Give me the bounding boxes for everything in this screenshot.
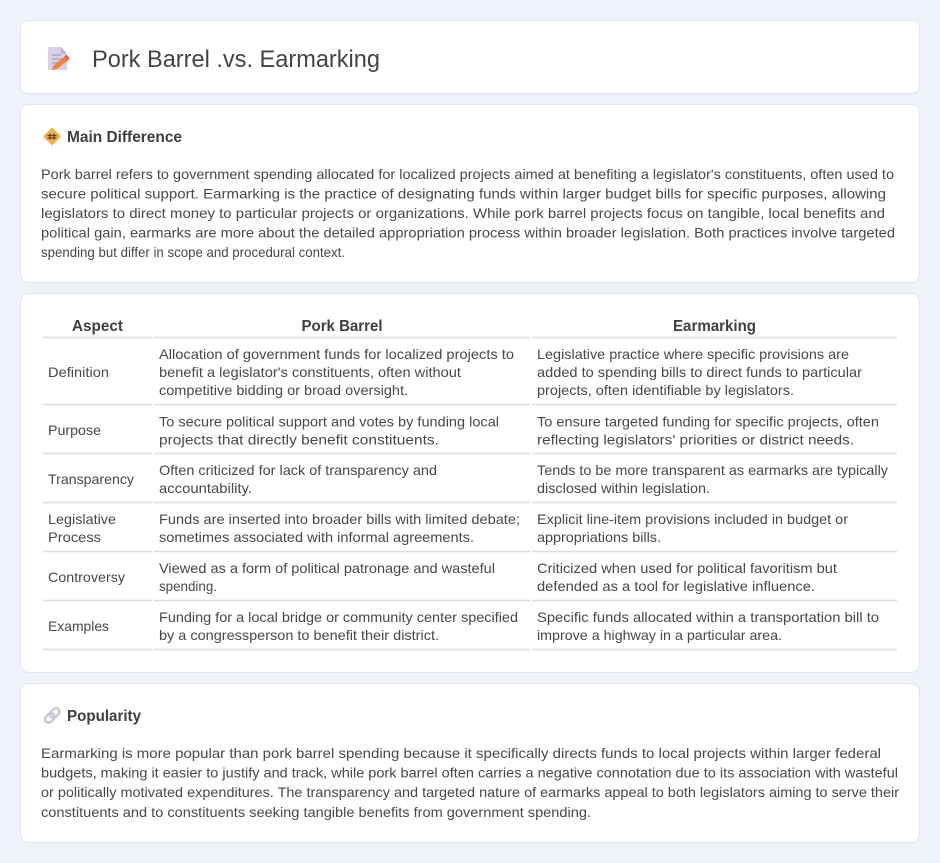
text block: popularity — [41, 745, 899, 820]
icon: road sign diamond — [44, 128, 60, 144]
row: legislative process — [43, 511, 897, 552]
text block: main difference — [41, 166, 895, 260]
table header: Aspect — [72, 318, 124, 335]
row: controversy: defended as a tool for legislative influence. — [537, 578, 815, 594]
row: legislative process: Legislative — [48, 511, 116, 527]
row: controversy: Controversy — [48, 569, 125, 585]
heading: popularity: Popularity — [67, 708, 141, 725]
panel: main difference — [20, 104, 920, 282]
row: examples: Examples — [48, 618, 109, 634]
row: transparency: disclosed within legislation. — [537, 480, 710, 496]
row: examples: improve a highway in a particular area. — [537, 627, 782, 643]
row: examples: Specific funds allocated within a transportation bill to — [537, 609, 879, 625]
row: purpose — [43, 414, 897, 454]
text block: main difference: Pork barrel refers to government spending allocated for localized projects aimed at benefiting a legislator's constituents, often used to — [41, 166, 894, 182]
row: definition: Allocation of government funds for localized projects to — [159, 346, 514, 362]
row: definition: projects, often identifiable by legislators. — [537, 382, 794, 398]
text block: main difference: political gain, earmarks are more about the detailed appropriation process within broader legislation. Both practices involve targeted — [41, 224, 895, 240]
text block: popularity: Earmarking is more popular than pork barrel spending because it specifically directs funds to local projects within larger federal — [41, 745, 881, 761]
row: transparency: accountability. — [159, 480, 252, 496]
row: purpose: reflecting legislators' priorities or district needs. — [537, 432, 854, 448]
row: definition: Definition — [48, 364, 109, 380]
row: purpose: projects that directly benefit constituents. — [159, 432, 439, 448]
row: legislative process: appropriations bills. — [537, 529, 661, 545]
row: transparency — [43, 462, 897, 502]
text block: main difference: spending but differ in scope and procedural context. — [41, 244, 345, 260]
row: controversy: Criticized when used for political favoritism but — [537, 560, 837, 576]
row: definition: competitive bidding or broad oversight. — [159, 382, 408, 398]
row: definition: added to spending bills to direct funds to particular — [537, 364, 862, 380]
header panel — [20, 20, 920, 94]
row: definition: Legislative practice where specific provisions are — [537, 346, 849, 362]
row: legislative process: Process — [48, 529, 101, 545]
text block: main difference: secure political support. Earmarking is the practice of designating funds within larger budget bills for specific purposes, allowing — [41, 186, 886, 202]
icon: chain link — [44, 707, 61, 724]
row: controversy — [43, 560, 897, 600]
row: examples — [43, 609, 897, 650]
icon: document with pencil — [48, 47, 70, 70]
table header — [43, 318, 897, 338]
row: controversy: spending. — [159, 578, 217, 594]
row: purpose: Purpose — [48, 422, 101, 438]
panel: popularity — [20, 684, 920, 842]
table header: Earmarking — [673, 318, 756, 335]
text block: popularity: budgets, making it easier to justify and track, while pork barrel often carries a negative connotation due to its association with wasteful — [41, 764, 898, 780]
panel: comparison table — [20, 294, 920, 672]
row: legislative process: sometimes associated with informal agreements. — [159, 529, 474, 545]
row: definition — [43, 346, 897, 404]
row: transparency: Tends to be more transparent as earmarks are typically — [537, 462, 888, 478]
text block: popularity: or politically motivated expenditures. The transparency and targeted nature of earmarks appeal to both legislators aiming to serve their — [41, 784, 899, 800]
row: examples: by a congressperson to benefit their district. — [159, 627, 439, 643]
row: purpose: To secure political support and votes by funding local — [159, 414, 499, 430]
row: definition: benefit a legislator's constituents, often without — [159, 364, 461, 380]
row: transparency: Transparency — [48, 471, 134, 487]
text block: popularity: constituents and to constituents seeking tangible benefits from government spending. — [41, 804, 591, 820]
text block: main difference: legislators to direct money to particular projects or organizations. While pork barrel projects focus on tangible, local benefits and — [41, 205, 885, 221]
heading: main difference: Main Difference — [67, 129, 182, 146]
title: Pork Barrel .vs. Earmarking — [92, 46, 380, 73]
row: controversy: Viewed as a form of political patronage and wasteful — [159, 560, 495, 576]
row: legislative process: Explicit line-item provisions included in budget or — [537, 511, 848, 527]
row: examples: Funding for a local bridge or community center specified — [159, 609, 518, 625]
row: legislative process: Funds are inserted into broader bills with limited debate; — [159, 511, 520, 527]
row: transparency: Often criticized for lack of transparency and — [159, 462, 437, 478]
table header: Pork Barrel — [302, 318, 382, 335]
row: purpose: To ensure targeted funding for specific projects, often — [537, 414, 879, 430]
